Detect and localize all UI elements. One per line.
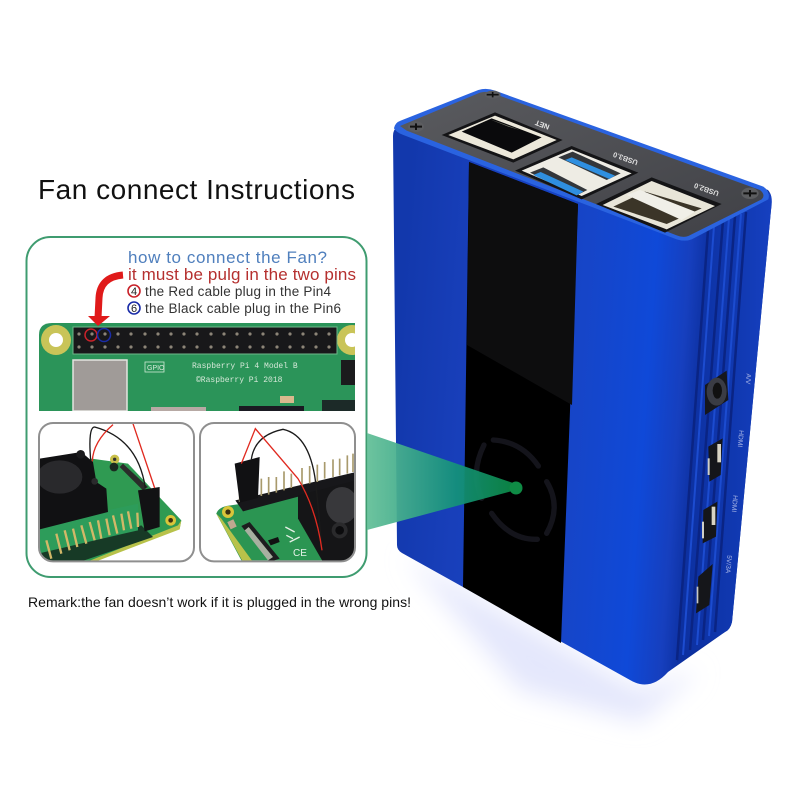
text: two pins warning: it must be pulg in the two pins <box>128 265 356 284</box>
port: ethernet: NET <box>533 118 551 132</box>
case body <box>393 90 772 684</box>
top port plate <box>394 89 769 241</box>
side ports: HDMI <box>736 430 744 448</box>
infographic canvas <box>26 88 772 724</box>
case side face with fins <box>677 193 772 662</box>
photo: Raspberry Pi GPIO header: GPIO <box>147 365 165 372</box>
side ports: 5V/3A <box>724 555 732 574</box>
callout: green beam to fan location <box>367 433 522 530</box>
side ports <box>696 371 752 613</box>
photo: right fan wiring: CE <box>293 548 307 559</box>
port: USB 3.0 <box>515 146 639 199</box>
photo: Raspberry Pi GPIO header: Raspberry Pi 4 Model B <box>192 362 298 371</box>
side ports: A/V <box>744 373 752 385</box>
product: blue aluminium case <box>393 89 772 685</box>
port: ethernet <box>442 112 563 163</box>
photo: Raspberry Pi GPIO header: ©Raspberry Pi 2018 <box>196 376 283 385</box>
screws <box>408 91 759 199</box>
panel: connection instructions <box>26 237 367 577</box>
fan vent ring <box>476 440 554 539</box>
port: USB 2.0 <box>596 177 722 233</box>
remark text: Remark:the fan doesn’t work if it is plugged in the wrong pins! <box>28 594 411 610</box>
port: USB 2.0: USB2.0 <box>693 181 720 198</box>
port: USB 3.0: USB3.0 <box>612 150 639 167</box>
pin 4 note: the Red cable plug in the Pin4 <box>145 284 331 299</box>
black front band <box>463 162 578 643</box>
pin 6 note: the Black cable plug in the Pin6 <box>145 301 341 316</box>
arrow: red pointer to pins <box>88 275 123 326</box>
side ports: HDMI <box>730 495 738 513</box>
text: how to connect: how to connect the Fan? <box>128 248 327 267</box>
title: Fan connect Instructions <box>38 174 355 205</box>
pin 4 note: 4 <box>131 286 137 298</box>
pin 6 note: 6 <box>131 303 137 315</box>
photo: Raspberry Pi GPIO header <box>39 323 367 413</box>
photo: left fan wiring <box>37 423 194 561</box>
case shadow <box>405 556 700 722</box>
photo: right fan wiring <box>200 423 358 562</box>
